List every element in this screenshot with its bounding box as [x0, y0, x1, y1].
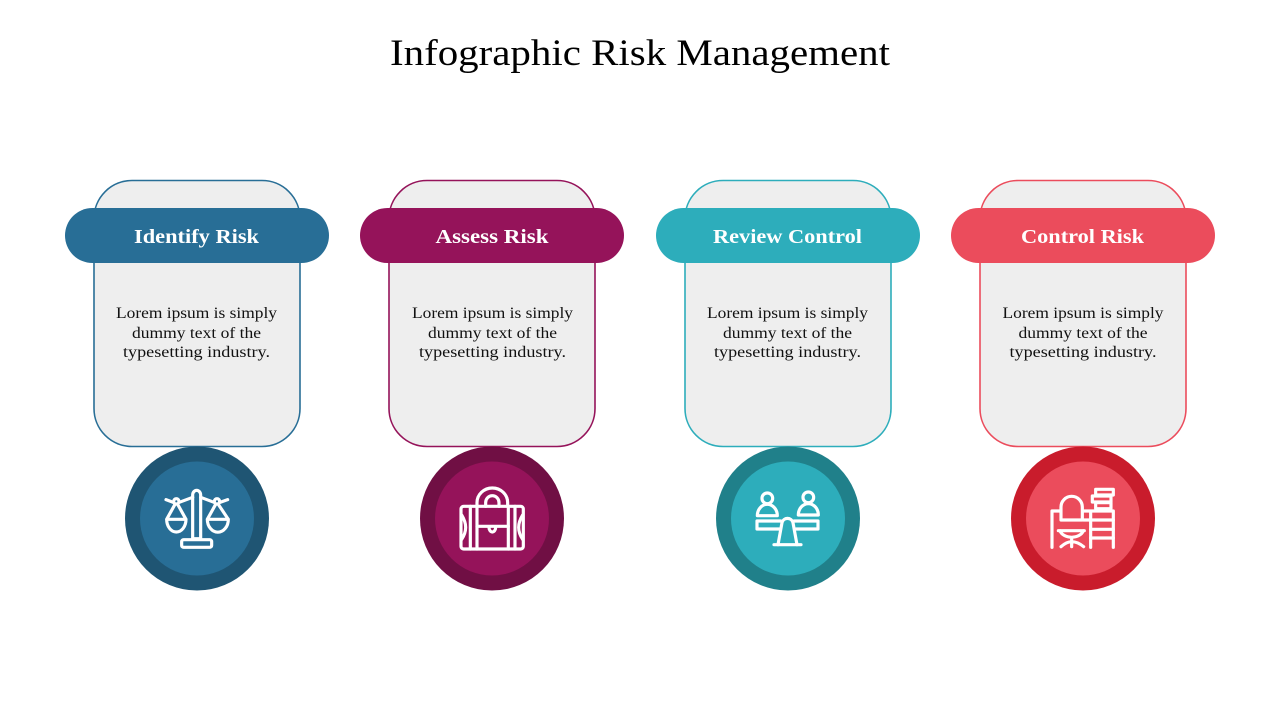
heading: Assess Risk [436, 226, 550, 248]
heading pill [951, 208, 1215, 263]
body text [707, 305, 868, 361]
body text: Lorem ipsum is simply [412, 305, 573, 322]
icon: desk and chair [1052, 489, 1113, 547]
icon circle [125, 446, 269, 590]
heading pill [360, 208, 624, 263]
body text: dummy text of the [428, 325, 557, 342]
panel: assess risk [360, 180, 624, 590]
heading: Control Risk [1021, 226, 1145, 248]
body text: typesetting industry. [419, 344, 566, 361]
panel: review control [656, 180, 920, 590]
icon: briefcase [461, 488, 523, 549]
card [94, 180, 300, 446]
body text: dummy text of the [1018, 325, 1148, 342]
heading: Review Control [713, 226, 862, 248]
icon circle [1011, 446, 1155, 590]
icon circle [420, 446, 564, 590]
body text [1002, 305, 1164, 361]
body text: Lorem ipsum is simply [707, 305, 868, 322]
body text: typesetting industry. [714, 344, 861, 361]
body text: dummy text of the [132, 325, 261, 342]
body text: typesetting industry. [123, 344, 270, 361]
body text: Lorem ipsum is simply [116, 305, 277, 322]
card [389, 180, 595, 446]
body text [116, 305, 277, 361]
panel: identify risk [65, 180, 329, 590]
icon: seesaw with people [757, 492, 818, 545]
icon circle [716, 446, 860, 590]
body text: Lorem ipsum is simply [1002, 305, 1164, 322]
body text: dummy text of the [723, 325, 852, 342]
card [980, 180, 1186, 446]
body text: typesetting industry. [1010, 344, 1156, 361]
heading pill [65, 208, 329, 263]
icon: balance scales [166, 490, 228, 547]
title: Infographic Risk Management [390, 33, 891, 74]
heading: Identify Risk [134, 226, 260, 248]
panel: control risk [951, 180, 1215, 590]
body text [412, 305, 573, 361]
card [685, 180, 891, 446]
heading pill [656, 208, 920, 263]
